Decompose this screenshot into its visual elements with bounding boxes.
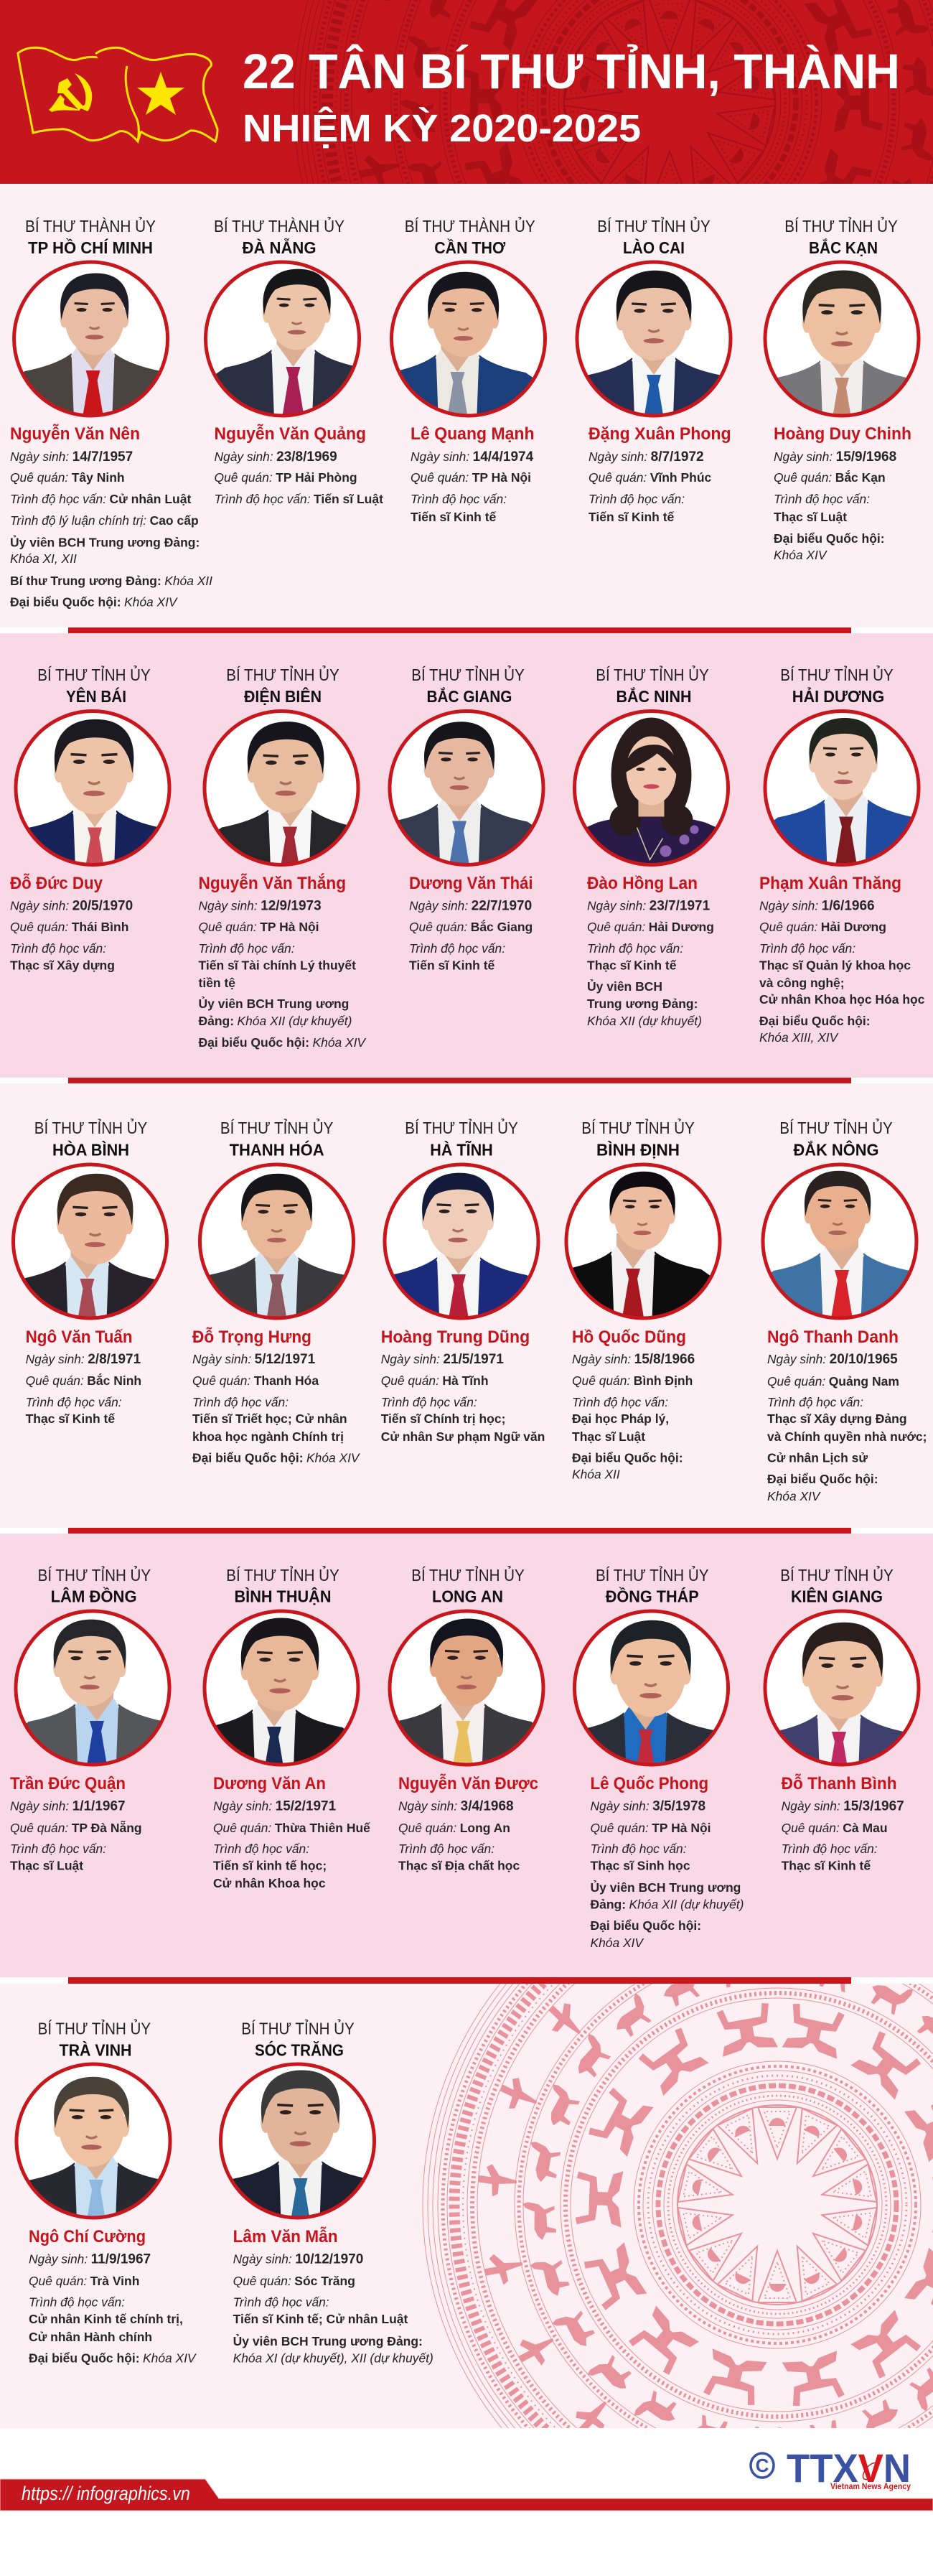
details: Thạc sĩ Sinh học bbox=[590, 1858, 690, 1872]
heading: KIÊN GIANG bbox=[791, 1587, 883, 1606]
details: Quê quán: Bắc Giang bbox=[409, 919, 533, 934]
details: Ngày sinh: 15/8/1966 bbox=[572, 1352, 695, 1367]
heading: BÌNH THUẬN bbox=[234, 1587, 332, 1606]
name: Đỗ Thanh Bình bbox=[782, 1773, 897, 1793]
person: Hồ Quốc Dũng bbox=[543, 1117, 723, 1482]
details: Đại biểu Quốc hội: bbox=[759, 1014, 871, 1028]
portrait bbox=[561, 711, 741, 882]
details: Bí thư Trung ương Đảng: Khóa XII bbox=[10, 574, 212, 588]
details: Quê quán: TP Hải Phòng bbox=[214, 470, 357, 485]
details: Đại biểu Quốc hội: bbox=[767, 1472, 878, 1486]
details: Khóa XIV bbox=[774, 548, 827, 562]
details: Quê quán: Bắc Kạn bbox=[774, 470, 886, 485]
portrait bbox=[7, 1611, 187, 1783]
heading bbox=[38, 2017, 151, 2059]
name: Ngô Chí Cường bbox=[29, 2227, 146, 2246]
details: Tiến sĩ kinh tế học; bbox=[213, 1858, 327, 1872]
name: Hoàng Trung Dũng bbox=[381, 1327, 530, 1347]
name: Nguyễn Văn Quảng bbox=[214, 424, 366, 444]
heading bbox=[25, 215, 156, 257]
details: Ngày sinh: 15/9/1968 bbox=[774, 449, 896, 465]
title line 2: NHIỆM KỲ 2020-2025 bbox=[243, 106, 641, 150]
person: Lâm Văn Mẫn bbox=[211, 2017, 433, 2365]
details: Trình độ học vấn: bbox=[192, 1395, 289, 1409]
portrait bbox=[749, 1611, 929, 1793]
details: Tiến sĩ Kinh tế bbox=[409, 958, 495, 972]
person: Nguyễn Văn Được bbox=[373, 1564, 553, 1872]
details: Ngày sinh: 1/1/1967 bbox=[10, 1799, 126, 1814]
heading bbox=[780, 664, 894, 706]
heading: BÍ THƯ TỈNH ỦY bbox=[780, 1564, 894, 1585]
heading: LÂM ĐỒNG bbox=[51, 1587, 137, 1606]
details: Quê quán: Hà Tĩnh bbox=[381, 1373, 489, 1388]
details: Trình độ học vấn: bbox=[26, 1395, 122, 1409]
details bbox=[198, 899, 366, 1050]
details: Ngày sinh: 22/7/1970 bbox=[409, 899, 532, 913]
details: Quê quán: Thừa Thiên Huế bbox=[213, 1821, 370, 1835]
details: Thạc sĩ Kinh tế bbox=[26, 1411, 115, 1426]
name: Phạm Xuân Thăng bbox=[759, 874, 901, 893]
details: Quê quán: Bình Định bbox=[572, 1373, 693, 1388]
person: Ngô Chí Cường bbox=[6, 2017, 197, 2365]
portrait bbox=[369, 1165, 548, 1336]
heading: BÍ THƯ TỈNH ỦY bbox=[784, 215, 898, 235]
title line 1: 22 TÂN BÍ THƯ TỈNH, THÀNH bbox=[243, 44, 900, 99]
heading: TP HỒ CHÍ MINH bbox=[28, 238, 153, 257]
details: Đại biểu Quốc hội: Khóa XIV bbox=[198, 1035, 366, 1050]
heading: BÍ THƯ TỈNH ỦY bbox=[241, 2017, 355, 2038]
portrait bbox=[202, 709, 360, 867]
details: Ngày sinh: 12/9/1973 bbox=[198, 899, 322, 913]
details: Ngày sinh: 8/7/1972 bbox=[589, 449, 704, 465]
details: Thạc sĩ Luật bbox=[10, 1858, 83, 1872]
portrait bbox=[390, 260, 547, 418]
details: Quê quán: Long An bbox=[398, 1821, 510, 1835]
heading bbox=[241, 2017, 355, 2059]
heading: BÍ THƯ TỈNH ỦY bbox=[581, 1117, 695, 1137]
heading bbox=[214, 215, 344, 257]
person: Đỗ Trọng Hưng bbox=[187, 1117, 366, 1465]
panel: row 4 background bbox=[0, 1534, 933, 1977]
person: Đỗ Thanh Bình bbox=[749, 1564, 929, 1872]
details: khoa học ngành Chính trị bbox=[192, 1429, 344, 1444]
details: Trình độ lý luận chính trị: Cao cấp bbox=[10, 513, 199, 528]
heading: BÍ THƯ THÀNH ỦY bbox=[214, 215, 344, 235]
heading: BÍ THƯ TỈNH ỦY bbox=[226, 664, 339, 684]
details bbox=[759, 899, 925, 1045]
panel: row 5 background bbox=[0, 1984, 933, 2428]
details bbox=[10, 1799, 142, 1872]
heading bbox=[581, 1117, 695, 1159]
details bbox=[774, 449, 896, 562]
heading: ĐẮK NÔNG bbox=[794, 1140, 878, 1159]
details: Trình độ học vấn: bbox=[759, 941, 855, 956]
heading bbox=[784, 215, 898, 257]
details: Ủy viên BCH Trung ương Đảng: bbox=[233, 2333, 423, 2348]
details: Trung ương Đảng: bbox=[587, 997, 698, 1011]
logo: TTXVN: C bbox=[756, 2455, 769, 2476]
name: Nguyễn Văn Nên bbox=[10, 424, 140, 444]
details: Trình độ học vấn: bbox=[10, 941, 106, 956]
details: Ngày sinh: 5/12/1971 bbox=[192, 1352, 316, 1367]
heading: BÌNH ĐỊNH bbox=[596, 1140, 680, 1159]
heading: BÍ THƯ TỈNH ỦY bbox=[411, 664, 525, 684]
heading: BÍ THƯ TỈNH ỦY bbox=[37, 664, 151, 684]
name: Đỗ Đức Duy bbox=[10, 873, 103, 893]
heading: HẢI DƯƠNG bbox=[792, 686, 884, 706]
details: Cử nhân Khoa học Hóa học bbox=[759, 992, 925, 1007]
details bbox=[411, 449, 534, 524]
portrait bbox=[764, 260, 920, 418]
heading: HÀ TĨNH bbox=[430, 1140, 493, 1159]
details: và Chính quyền nhà nước; bbox=[767, 1429, 927, 1444]
details bbox=[10, 899, 133, 972]
name: Dương Văn Thái bbox=[409, 874, 533, 893]
details: Trình độ học vấn: bbox=[381, 1395, 477, 1409]
name: Trần Đức Quận bbox=[10, 1774, 126, 1793]
details: Ngày sinh: 3/4/1968 bbox=[398, 1799, 514, 1814]
details: Thạc sĩ Quản lý khoa học bbox=[759, 958, 911, 972]
details: Ngày sinh: 15/2/1971 bbox=[213, 1799, 337, 1814]
icon: yellow star bbox=[137, 72, 184, 115]
details: Đảng: Khóa XII (dự khuyết) bbox=[198, 1014, 352, 1028]
portrait bbox=[388, 709, 545, 867]
details bbox=[29, 2251, 197, 2365]
decoration: bronze drum pattern bbox=[294, 0, 933, 479]
heading: BÍ THƯ TỈNH ỦY bbox=[779, 1117, 893, 1137]
heading bbox=[220, 1117, 333, 1159]
details: Đại biểu Quốc hội: bbox=[774, 531, 885, 546]
details: Trình độ học vấn: bbox=[10, 1842, 106, 1856]
name: Đỗ Trọng Hưng bbox=[192, 1327, 311, 1347]
details: Ngày sinh: 23/8/1969 bbox=[214, 449, 337, 465]
details: Tiến sĩ Kinh tế bbox=[411, 510, 497, 524]
details: Thạc sĩ Xây dựng bbox=[10, 958, 115, 972]
person: Dương Văn An bbox=[184, 1564, 370, 1890]
name: Lâm Văn Mẫn bbox=[233, 2226, 338, 2246]
details: tiền tệ bbox=[198, 976, 235, 990]
details bbox=[590, 1799, 744, 1950]
details: Trình độ học vấn: bbox=[213, 1842, 309, 1856]
heading: LÀO CAI bbox=[623, 238, 685, 257]
details: Ngày sinh: 14/4/1974 bbox=[411, 449, 534, 465]
details: Trình độ học vấn: bbox=[572, 1395, 668, 1409]
heading: BÍ THƯ TỈNH ỦY bbox=[596, 1564, 708, 1585]
details: Quê quán: TP Hà Nội bbox=[411, 470, 531, 485]
details: Quê quán: Hải Dương bbox=[587, 920, 714, 934]
name: Ngô Văn Tuấn bbox=[26, 1327, 133, 1347]
heading: TRÀ VINH bbox=[59, 2040, 132, 2059]
details: Thạc sĩ Luật bbox=[774, 510, 847, 524]
heading: BÍ THƯ TỈNH ỦY bbox=[38, 1564, 151, 1585]
details: Khóa XII (dự khuyết) bbox=[587, 1014, 702, 1028]
details: Trình độ học vấn: Cử nhân Luật bbox=[10, 492, 191, 506]
details: Tiến sĩ Kinh tế; Cử nhân Luật bbox=[233, 2312, 408, 2326]
heading bbox=[779, 1117, 893, 1159]
details: Ngày sinh: 23/7/1971 bbox=[587, 899, 711, 913]
heading: BÍ THƯ TỈNH ỦY bbox=[38, 2017, 151, 2038]
person: Hoàng Trung Dũng bbox=[369, 1117, 548, 1444]
details bbox=[10, 449, 212, 609]
name: Đặng Xuân Phong bbox=[589, 424, 731, 444]
details: Trình độ học vấn: bbox=[198, 941, 295, 956]
details bbox=[192, 1352, 360, 1465]
details bbox=[381, 1352, 545, 1444]
heading: BÍ THƯ TỈNH ỦY bbox=[226, 1564, 339, 1585]
portrait bbox=[555, 1611, 735, 1791]
panel: row 3 background bbox=[0, 1083, 933, 1528]
details: Ngày sinh: 11/9/1967 bbox=[29, 2251, 151, 2267]
details: Đảng: Khóa XII (dự khuyết) bbox=[590, 1898, 744, 1912]
heading: BÍ THƯ TỈNH ỦY bbox=[411, 1564, 525, 1585]
details: Ngày sinh: 10/12/1970 bbox=[233, 2251, 363, 2267]
details: Khóa XII bbox=[572, 1467, 620, 1482]
details: Khóa XI, XII bbox=[10, 551, 77, 566]
details bbox=[409, 899, 533, 972]
details bbox=[767, 1352, 927, 1503]
name: Nguyễn Văn Được bbox=[398, 1773, 538, 1793]
person: Lê Quốc Phong bbox=[555, 1564, 744, 1950]
details: Quê quán: TP Hà Nội bbox=[198, 920, 319, 934]
details bbox=[782, 1799, 904, 1872]
details: Ủy viên BCH Trung ương bbox=[590, 1880, 741, 1895]
person: Đặng Xuân Phong bbox=[576, 217, 732, 521]
heading bbox=[226, 1564, 339, 1606]
details bbox=[213, 1799, 370, 1890]
details: Đại học Pháp lý, bbox=[572, 1411, 669, 1426]
details: Ngày sinh: 15/3/1967 bbox=[782, 1799, 904, 1814]
details: Thạc sĩ Kinh tế bbox=[587, 958, 677, 972]
details: Trình độ học vấn: bbox=[589, 492, 685, 506]
heading bbox=[405, 1117, 518, 1159]
details: Quê quán: TP Hà Nội bbox=[590, 1821, 711, 1835]
heading: BẮC GIANG bbox=[426, 686, 512, 706]
name: Hồ Quốc Dũng bbox=[572, 1327, 686, 1347]
details: và công nghệ; bbox=[759, 976, 845, 990]
portrait bbox=[0, 1165, 177, 1340]
portrait bbox=[211, 2064, 390, 2240]
portrait bbox=[576, 260, 732, 418]
person: Nguyễn Văn Quảng bbox=[204, 215, 383, 506]
details: Quê quán: Tây Ninh bbox=[10, 470, 125, 485]
person: Nguyễn Văn Nên bbox=[4, 215, 212, 609]
heading bbox=[38, 1564, 151, 1606]
details: Ủy viên BCH Trung ương Đảng: bbox=[10, 534, 200, 550]
details bbox=[214, 449, 383, 506]
heading bbox=[405, 215, 535, 257]
details: Ngày sinh: 3/5/1978 bbox=[590, 1799, 705, 1814]
details bbox=[233, 2251, 433, 2365]
footer band bbox=[0, 2479, 933, 2511]
person: Nguyễn Văn Thắng bbox=[198, 664, 380, 1050]
details: Tiến sĩ Chính trị học; bbox=[381, 1411, 505, 1426]
heading: ĐÀ NẴNG bbox=[243, 238, 316, 257]
person: Ngô Văn Tuấn bbox=[0, 1117, 177, 1426]
heading: BÍ THƯ TỈNH ỦY bbox=[596, 664, 709, 684]
heading bbox=[34, 1117, 147, 1159]
heading bbox=[780, 1564, 894, 1606]
heading bbox=[596, 1564, 708, 1606]
heading bbox=[411, 1564, 525, 1606]
details: Khóa XI (dự khuyết), XII (dự khuyết) bbox=[233, 2351, 433, 2365]
person: Đỗ Đức Duy bbox=[10, 666, 171, 972]
portrait bbox=[187, 1165, 366, 1336]
person: Lê Quang Mạnh bbox=[390, 217, 547, 521]
person: Hoàng Duy Chinh bbox=[764, 217, 920, 559]
heading: LONG AN bbox=[432, 1587, 503, 1606]
heading: ĐIỆN BIÊN bbox=[244, 686, 322, 706]
footer url: https:// infographics.vn bbox=[22, 2483, 190, 2504]
portrait bbox=[756, 711, 933, 879]
details bbox=[589, 449, 712, 524]
details: Cử nhân Hành chính bbox=[29, 2330, 152, 2344]
details: Thạc sĩ Địa chất học bbox=[398, 1858, 520, 1872]
details: Ngày sinh: 20/10/1965 bbox=[767, 1352, 898, 1367]
details bbox=[587, 899, 714, 1028]
details: Cử nhân Khoa học bbox=[213, 1876, 326, 1890]
details: Thạc sĩ Xây dựng Đảng bbox=[767, 1411, 907, 1426]
name: Nguyễn Văn Thắng bbox=[198, 873, 346, 893]
details: Khóa XIII, XIV bbox=[759, 1030, 839, 1045]
portrait bbox=[14, 709, 171, 867]
details: Ngày sinh: 20/5/1970 bbox=[10, 899, 133, 913]
panel: row 1 background bbox=[0, 184, 933, 627]
details: Đại biểu Quốc hội: bbox=[590, 1918, 701, 1933]
heading: BÍ THƯ THÀNH ỦY bbox=[25, 215, 156, 235]
details: Trình độ học vấn: bbox=[233, 2295, 329, 2310]
details: Khóa XIV bbox=[590, 1936, 644, 1950]
portrait bbox=[6, 2064, 186, 2241]
heading: BÍ THƯ TỈNH ỦY bbox=[220, 1117, 333, 1137]
heading: SÓC TRĂNG bbox=[255, 2040, 344, 2059]
details: Khóa XIV bbox=[767, 1489, 821, 1503]
name: Hoàng Duy Chinh bbox=[774, 424, 911, 444]
details: Quê quán: Vĩnh Phúc bbox=[589, 470, 712, 485]
details: Đại biểu Quốc hội: bbox=[572, 1451, 683, 1465]
details: Đại biểu Quốc hội: Khóa XIV bbox=[192, 1451, 360, 1465]
details: Cử nhân Sư phạm Ngữ văn bbox=[381, 1429, 545, 1444]
details: Trình độ học vấn: Tiến sĩ Luật bbox=[214, 492, 383, 506]
panel: row 2 background bbox=[0, 633, 933, 1078]
details: Tiến sĩ Tài chính Lý thuyết bbox=[198, 958, 356, 972]
heading bbox=[411, 664, 525, 706]
details: Đại biểu Quốc hội: Khóa XIV bbox=[10, 594, 178, 609]
heading bbox=[226, 664, 339, 706]
details: Quê quán: Thái Bình bbox=[10, 920, 128, 934]
details: Quê quán: Sóc Trăng bbox=[233, 2274, 355, 2288]
logo: TTXVN: Vietnam News Agency bbox=[830, 2481, 911, 2491]
panel: header banner bbox=[0, 0, 933, 184]
decoration: bronze drum in last row bbox=[423, 1850, 933, 2559]
heading bbox=[597, 215, 711, 257]
person: Dương Văn Thái bbox=[388, 666, 545, 969]
details: Ngày sinh: 2/8/1971 bbox=[26, 1352, 141, 1367]
name: Ngô Thanh Danh bbox=[767, 1327, 899, 1347]
details: Quê quán: Hải Dương bbox=[759, 920, 886, 934]
name: Lê Quang Mạnh bbox=[411, 424, 534, 444]
portrait bbox=[204, 260, 361, 418]
details: Cử nhân Lịch sử bbox=[767, 1451, 868, 1465]
person: Đào Hồng Lan bbox=[561, 664, 741, 1028]
details: Quê quán: Thanh Hóa bbox=[192, 1373, 319, 1388]
details: Trình độ học vấn: bbox=[29, 2295, 125, 2310]
details: Ủy viên BCH bbox=[587, 979, 662, 994]
details bbox=[26, 1352, 141, 1426]
details: Quê quán: TP Đà Nẵng bbox=[10, 1819, 142, 1835]
heading: BÍ THƯ TỈNH ỦY bbox=[597, 215, 711, 235]
heading: BÍ THƯ TỈNH ỦY bbox=[405, 1117, 518, 1137]
heading bbox=[596, 664, 709, 706]
logo: TTXVN: TTXVN bbox=[787, 2445, 911, 2491]
heading: YÊN BÁI bbox=[66, 686, 126, 706]
details: Tiến sĩ Kinh tế bbox=[589, 510, 675, 524]
details: Ngày sinh: 21/5/1971 bbox=[381, 1352, 504, 1367]
details: Quê quán: Bắc Ninh bbox=[26, 1373, 141, 1388]
details: Cử nhân Kinh tế chính trị, bbox=[29, 2312, 183, 2326]
details: Ủy viên BCH Trung ương bbox=[198, 996, 349, 1011]
details: Thạc sĩ Kinh tế bbox=[782, 1858, 871, 1872]
details: Quê quán: Cà Mau bbox=[782, 1821, 888, 1835]
heading: BẮC NINH bbox=[616, 686, 692, 706]
person: Trần Đức Quận bbox=[7, 1564, 187, 1872]
portrait bbox=[184, 1611, 364, 1788]
details bbox=[572, 1352, 695, 1482]
details: Trình độ học vấn: bbox=[411, 492, 507, 506]
heading bbox=[37, 664, 151, 706]
name: Đào Hồng Lan bbox=[587, 874, 698, 893]
heading: BÍ THƯ THÀNH ỦY bbox=[405, 215, 535, 235]
heading: BẮC KẠN bbox=[809, 238, 878, 257]
heading: HÒA BÌNH bbox=[52, 1140, 129, 1159]
details: Quê quán: Quảng Nam bbox=[767, 1374, 899, 1389]
heading: BÍ THƯ TỈNH ỦY bbox=[34, 1117, 147, 1137]
portrait bbox=[543, 1165, 723, 1330]
details: Trình độ học vấn: bbox=[782, 1842, 878, 1856]
portrait bbox=[12, 260, 169, 418]
heading: CẦN THƠ bbox=[434, 238, 506, 257]
details: Trình độ học vấn: bbox=[774, 492, 870, 506]
details: Trình độ học vấn: bbox=[767, 1395, 863, 1409]
heading: BÍ THƯ TỈNH ỦY bbox=[780, 664, 894, 684]
details: Ngày sinh: 1/6/1966 bbox=[759, 899, 875, 913]
person: Phạm Xuân Thăng bbox=[756, 664, 933, 1045]
details: Trình độ học vấn: bbox=[398, 1842, 494, 1856]
icon: party and national flags bbox=[18, 47, 217, 141]
icon: hammer and sickle bbox=[49, 73, 92, 112]
details: Trình độ học vấn: bbox=[587, 941, 683, 956]
heading: ĐỒNG THÁP bbox=[606, 1587, 699, 1606]
details: Đại biểu Quốc hội: Khóa XIV bbox=[29, 2351, 197, 2365]
portrait bbox=[752, 1165, 932, 1332]
details: Thạc sĩ Luật bbox=[572, 1429, 645, 1444]
details: Trình độ học vấn: bbox=[590, 1842, 687, 1856]
heading: THANH HÓA bbox=[230, 1140, 324, 1159]
details: Ngày sinh: 14/7/1957 bbox=[10, 449, 133, 465]
name: Dương Văn An bbox=[213, 1774, 326, 1793]
portrait bbox=[373, 1611, 553, 1783]
person: Ngô Thanh Danh bbox=[752, 1117, 932, 1503]
details: Quê quán: Trà Vinh bbox=[29, 2274, 139, 2288]
details bbox=[398, 1799, 520, 1872]
details: Trình độ học vấn: bbox=[409, 941, 505, 956]
name: Lê Quốc Phong bbox=[590, 1774, 708, 1793]
details: Tiến sĩ Triết học; Cử nhân bbox=[192, 1411, 347, 1426]
